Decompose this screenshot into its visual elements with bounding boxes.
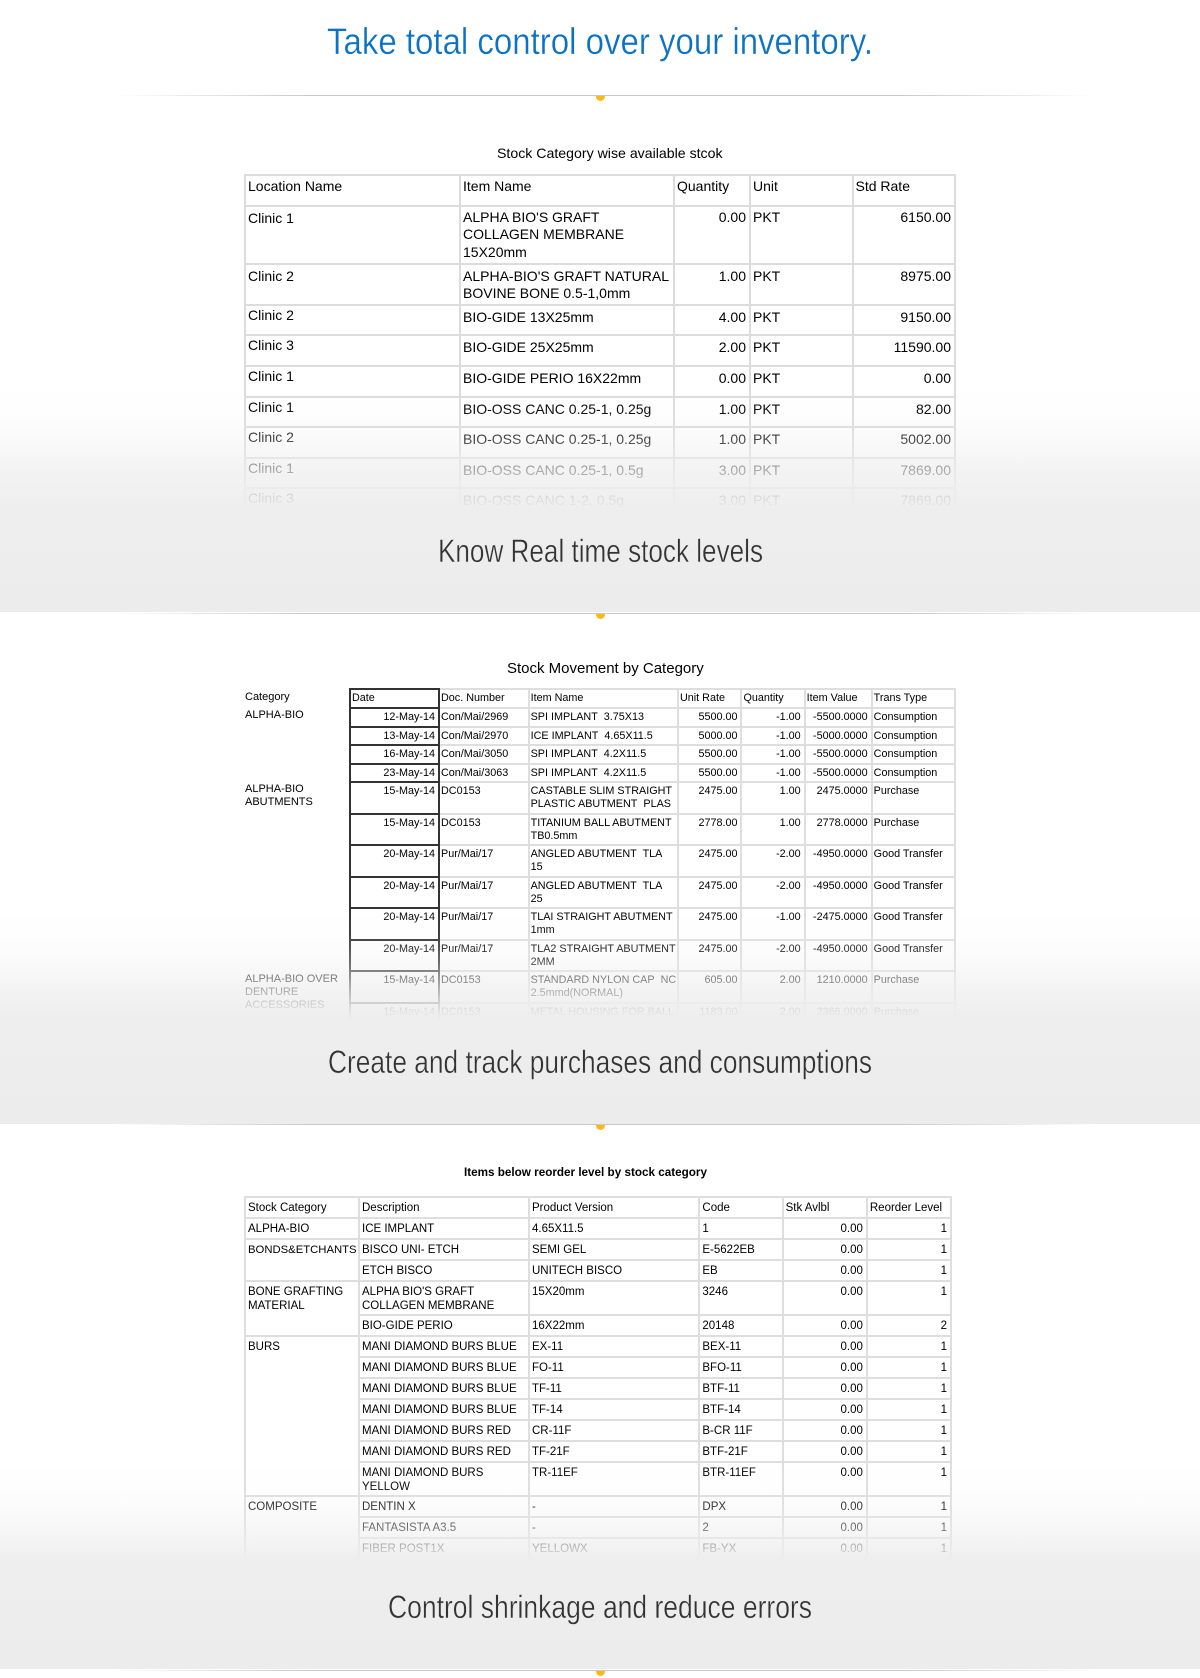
table: stock movement: -4950.0000 — [813, 848, 868, 860]
category labels: ALPHA-BIO OVER — [245, 973, 338, 985]
table: stock movement: -5500.0000 — [813, 766, 868, 778]
marker: section 3 dot — [596, 1671, 605, 1676]
table: stock movement: SPI IMPLANT 4.2X11.5 — [531, 766, 646, 778]
table: items below reorder level: 1 — [941, 1341, 947, 1353]
table: items below reorder level: 0.00 — [840, 1543, 863, 1555]
table: available stock: Quantity — [677, 178, 729, 194]
table: items below reorder level: ICE IMPLANT — [362, 1223, 434, 1235]
table: stock movement: 2475.0000 — [817, 785, 868, 797]
table: available stock: BIO-GIDE 13X25mm — [463, 309, 594, 325]
table: stock movement: -5500.0000 — [813, 748, 868, 760]
table: available stock — [244, 174, 956, 508]
table: items below reorder level: 2 — [941, 1320, 947, 1332]
table: items below reorder level: 0.00 — [840, 1223, 863, 1235]
table: available stock: 6150.00 — [900, 209, 951, 225]
table: items below reorder level: DPX — [702, 1501, 726, 1513]
table: available stock: Clinic 2 — [248, 268, 294, 284]
table: stock movement: Consumption — [874, 748, 937, 760]
table: available stock: Clinic 3 — [248, 337, 294, 353]
table: items below reorder level: MANI DIAMOND BURS BLUE — [362, 1362, 517, 1374]
table: stock movement: TLA2 STRAIGHT ABUTMENT — [531, 942, 676, 954]
table: stock movement: 15-May-14 — [383, 785, 435, 797]
table: stock movement: 1.00 — [780, 785, 801, 797]
table: available stock: BIO-OSS CANC 0.25-1, 0.25g — [463, 401, 651, 417]
table: stock movement: TITANIUM BALL ABUTMENT — [531, 816, 672, 828]
table: available stock: 9150.00 — [900, 309, 951, 325]
table: stock movement: ANGLED ABUTMENT TLA — [531, 848, 662, 860]
title: Take total control over your inventory. — [327, 21, 873, 62]
table: stock movement: 20-May-14 — [383, 848, 435, 860]
table: stock movement: Trans Type — [874, 692, 927, 704]
table: items below reorder level: TR-11EF — [532, 1467, 578, 1479]
table: items below reorder level: 1 — [941, 1244, 947, 1256]
table: items below reorder level: ALPHA BIO'S GRAFT — [362, 1286, 474, 1298]
table: items below reorder level: Product Version — [532, 1202, 613, 1214]
heading: real time stock levels: Know Real time stock levels — [438, 533, 763, 569]
table: items below reorder level: BURS — [248, 1341, 280, 1353]
table: items below reorder level: 0.00 — [840, 1425, 863, 1437]
table: stock movement: 605.00 — [704, 974, 737, 986]
table: available stock: BIO-GIDE 25X25mm — [463, 339, 594, 355]
table: items below reorder level: BTF-14 — [702, 1404, 741, 1416]
table title: stock category: Stock Category wise available stcok — [497, 145, 723, 161]
table: available stock: ALPHA BIO'S GRAFT COLLAGEN MEMBRANE 15X20mm — [463, 209, 624, 260]
category labels: Category — [245, 691, 290, 703]
table: stock movement: ANGLED ABUTMENT TLA — [531, 880, 662, 892]
table: stock movement: Con/Mai/2970 — [441, 730, 508, 742]
table: stock movement: Item Name — [531, 692, 583, 704]
table: available stock: PKT — [753, 209, 780, 225]
table: items below reorder level: 2 — [702, 1522, 709, 1534]
table: items below reorder level: BTF-21F — [702, 1446, 748, 1458]
table: stock movement: METAL HOUSING FOR BALL — [531, 1006, 674, 1018]
heading: shrinkage and errors: Control shrinkage and reduce errors — [388, 1589, 812, 1625]
table: available stock: 1.00 — [719, 268, 746, 284]
table: stock movement: -1.00 — [776, 730, 801, 742]
table: available stock: BIO-OSS CANC 1-2, 0.5g — [463, 492, 624, 508]
table: stock movement: 1.00 — [780, 816, 801, 828]
table: items below reorder level: 1 — [941, 1404, 947, 1416]
table: items below reorder level: 1 — [941, 1522, 947, 1534]
category labels: DENTURE — [245, 986, 298, 998]
table: stock movement: 2366.0000 — [817, 1006, 868, 1018]
table: items below reorder level: 0.00 — [840, 1522, 863, 1534]
table: items below reorder level: 0.00 — [840, 1362, 863, 1374]
table: items below reorder level: Stock Category — [248, 1202, 327, 1214]
table: stock movement: Pur/Mai/17 — [441, 848, 493, 860]
heading: purchases and consumptions: Create and track purchases and consumptions — [328, 1044, 872, 1080]
table: stock movement: PLASTIC ABUTMENT PLAS — [531, 798, 671, 810]
table: stock movement: 1210.0000 — [817, 974, 868, 986]
table: items below reorder level: 1 — [941, 1265, 947, 1277]
table: available stock: 3.00 — [719, 462, 746, 478]
table: stock movement: -5000.0000 — [813, 730, 868, 742]
table: items below reorder level: EX-11 — [532, 1341, 563, 1353]
table: items below reorder level: FIBER POST1X — [362, 1543, 444, 1555]
table: items below reorder level: Stk Avlbl — [786, 1202, 829, 1214]
table: available stock: 3.00 — [719, 492, 746, 508]
table: available stock: 1.00 — [719, 401, 746, 417]
table: stock movement: 1183.00 — [699, 1006, 737, 1018]
table: available stock: BIO-GIDE PERIO 16X22mm — [463, 370, 641, 386]
table: items below reorder level: 3246 — [702, 1286, 728, 1298]
table: items below reorder level: 1 — [941, 1286, 947, 1298]
table: items below reorder level: FANTASISTA A3.5 — [362, 1522, 456, 1534]
category labels: ACCESSORIES — [245, 999, 324, 1011]
category labels: ALPHA-BIO — [245, 709, 304, 721]
table: available stock: 2.00 — [719, 339, 746, 355]
table: available stock: PKT — [753, 268, 780, 284]
table title: reorder level: Items below reorder level by stock category — [464, 1166, 707, 1179]
table: stock movement: -4950.0000 — [813, 880, 868, 892]
table: stock movement: 20-May-14 — [383, 942, 435, 954]
table: stock movement: 2.00 — [780, 1006, 801, 1018]
table: items below reorder level: FO-11 — [532, 1362, 564, 1374]
table: items below reorder level: 0.00 — [840, 1501, 863, 1513]
table: stock movement: Con/Mai/3050 — [441, 748, 508, 760]
table: items below reorder level: - — [532, 1522, 536, 1534]
table: items below reorder level: 1 — [941, 1543, 947, 1555]
table: stock movement: Good Transfer — [874, 880, 943, 892]
table: items below reorder level: 1 — [941, 1425, 947, 1437]
table: stock movement: 5500.00 — [698, 748, 737, 760]
table: items below reorder level: 4.65X11.5 — [532, 1223, 584, 1235]
table: items below reorder level: EB — [702, 1265, 718, 1277]
table: items below reorder level: BIO-GIDE PERIO — [362, 1320, 453, 1332]
table: stock movement: -1.00 — [776, 766, 801, 778]
table: stock movement: Good Transfer — [874, 848, 943, 860]
table: stock movement: SPI IMPLANT 4.2X11.5 — [531, 748, 646, 760]
table: available stock: Clinic 1 — [248, 210, 294, 226]
table title: stock movement: Stock Movement by Category — [507, 660, 704, 677]
table: stock movement: Consumption — [874, 711, 937, 723]
table: items below reorder level: BONDS&ETCHANTS — [248, 1244, 357, 1256]
category labels — [245, 691, 338, 1011]
table: stock movement: -4950.0000 — [813, 942, 868, 954]
table: stock movement: 5500.00 — [698, 766, 737, 778]
table: stock movement: Good Transfer — [874, 911, 943, 923]
table: available stock: Item Name — [463, 178, 531, 194]
table: available stock: Unit — [753, 178, 778, 194]
table: stock movement: DC0153 — [441, 785, 481, 797]
table: available stock: ALPHA-BIO'S GRAFT NATURAL BOVINE BONE 0.5-1,0mm — [463, 268, 669, 301]
table: stock movement: Consumption — [874, 766, 937, 778]
table: available stock: 11590.00 — [894, 339, 951, 355]
table: items below reorder level: 0.00 — [840, 1404, 863, 1416]
table: items below reorder level: 15X20mm — [532, 1286, 584, 1298]
table: stock movement: 2.00 — [780, 974, 801, 986]
table: stock movement: Item Value — [807, 692, 857, 704]
table: available stock: Clinic 2 — [248, 429, 294, 445]
table: items below reorder level: Description — [362, 1202, 420, 1214]
table: items below reorder level: MANI DIAMOND BURS BLUE — [362, 1404, 517, 1416]
table: items below reorder level: - — [532, 1501, 536, 1513]
table: available stock: Clinic 2 — [248, 307, 294, 323]
table: available stock: Std Rate — [856, 178, 910, 194]
table: available stock: BIO-OSS CANC 0.25-1, 0.25g — [463, 431, 651, 447]
marker: top divider dot — [596, 96, 605, 101]
table: items below reorder level: BFO-11 — [702, 1362, 742, 1374]
table: items below reorder level — [244, 1196, 952, 1555]
table: items below reorder level: 1 — [941, 1467, 947, 1479]
table: available stock: Clinic 1 — [248, 399, 294, 415]
table: stock movement: 13-May-14 — [383, 730, 435, 742]
table: items below reorder level: TF-11 — [532, 1383, 562, 1395]
table: stock movement: Con/Mai/2969 — [441, 711, 508, 723]
table: items below reorder level: MANI DIAMOND BURS — [362, 1467, 483, 1479]
table: available stock: PKT — [753, 401, 780, 417]
table: items below reorder level: BEX-11 — [702, 1341, 741, 1353]
table: stock movement: -2.00 — [776, 848, 801, 860]
table: items below reorder level: FB-YX — [702, 1543, 736, 1555]
table: items below reorder level: 1 — [941, 1223, 947, 1235]
table: items below reorder level: 1 — [941, 1446, 947, 1458]
table: available stock: 7869.00 — [900, 462, 951, 478]
table: items below reorder level: 20148 — [702, 1320, 734, 1332]
table: items below reorder level: COLLAGEN MEMBRANE — [362, 1300, 494, 1312]
table: stock movement: -2.00 — [776, 880, 801, 892]
table: stock movement: -1.00 — [776, 711, 801, 723]
table: items below reorder level: 0.00 — [840, 1446, 863, 1458]
table: items below reorder level: DENTIN X — [362, 1501, 416, 1513]
table: stock movement: 2475.00 — [698, 880, 737, 892]
table: stock movement: DC0153 — [441, 1006, 481, 1018]
table: available stock: Clinic 1 — [248, 460, 294, 476]
table: items below reorder level: 1 — [941, 1501, 947, 1513]
table: stock movement: STANDARD NYLON CAP NC — [531, 974, 676, 986]
table: items below reorder level: YELLOW — [362, 1481, 410, 1493]
table: items below reorder level: BTR-11EF — [702, 1467, 756, 1479]
table: stock movement: -1.00 — [776, 748, 801, 760]
table: available stock: 0.00 — [719, 370, 746, 386]
table: stock movement: ICE IMPLANT 4.65X11.5 — [531, 730, 653, 742]
table: available stock: PKT — [753, 462, 780, 478]
table: stock movement: Purchase — [874, 816, 919, 828]
table: stock movement: -5500.0000 — [813, 711, 868, 723]
table: items below reorder level: MANI DIAMOND BURS BLUE — [362, 1341, 517, 1353]
table: stock movement: 20-May-14 — [383, 880, 435, 892]
table: stock movement: 2778.00 — [698, 816, 737, 828]
table: items below reorder level: TF-14 — [532, 1404, 563, 1416]
table: items below reorder level: 0.00 — [840, 1320, 863, 1332]
table: items below reorder level: 16X22mm — [532, 1320, 584, 1332]
table: stock movement: 23-May-14 — [383, 766, 435, 778]
table: available stock: PKT — [753, 370, 780, 386]
table: items below reorder level: 1 — [941, 1383, 947, 1395]
table: items below reorder level: COMPOSITE — [248, 1501, 317, 1513]
table: stock movement: 15-May-14 — [383, 1006, 435, 1018]
table: stock movement: DC0153 — [441, 816, 481, 828]
table: available stock: PKT — [753, 492, 780, 508]
table: items below reorder level: 1 — [702, 1223, 709, 1235]
table: items below reorder level: 0.00 — [840, 1286, 863, 1298]
table: stock movement: 2778.0000 — [817, 816, 868, 828]
table: stock movement: Pur/Mai/17 — [441, 911, 493, 923]
table: stock movement: 12-May-14 — [383, 711, 435, 723]
table: items below reorder level: 0.00 — [840, 1244, 863, 1256]
table: items below reorder level: YELLOWX — [532, 1543, 588, 1555]
table: available stock: 0.00 — [719, 209, 746, 225]
table: available stock: 4.00 — [719, 309, 746, 325]
table: items below reorder level: ETCH BISCO — [362, 1265, 432, 1277]
table: items below reorder level: 0.00 — [840, 1341, 863, 1353]
table: stock movement: 2MM — [531, 956, 555, 968]
table: items below reorder level: B-CR 11F — [702, 1425, 753, 1437]
table: items below reorder level: 1 — [941, 1362, 947, 1374]
table: stock movement: 5500.00 — [698, 711, 737, 723]
table: items below reorder level: TF-21F — [532, 1446, 570, 1458]
table: stock movement: 2475.00 — [698, 911, 737, 923]
table: stock movement: 15 — [531, 861, 543, 873]
table: stock movement: Date — [352, 692, 375, 704]
table: stock movement: CASTABLE SLIM STRAIGHT — [531, 785, 672, 797]
table: items below reorder level: E-5622EB — [702, 1244, 755, 1256]
table: available stock: 82.00 — [916, 401, 951, 417]
table: stock movement: SPI IMPLANT 3.75X13 — [531, 711, 644, 723]
table: items below reorder level: MATERIAL — [248, 1300, 305, 1312]
table: items below reorder level: BISCO UNI- ETCH — [362, 1244, 459, 1256]
table: stock movement: Unit Rate — [680, 692, 725, 704]
table: stock movement: 2.5mmd(NORMAL) — [531, 987, 623, 999]
table: stock movement: 20-May-14 — [383, 911, 435, 923]
table: items below reorder level: 0.00 — [840, 1383, 863, 1395]
table: stock movement: Con/Mai/3063 — [441, 766, 508, 778]
table: available stock: Clinic 3 — [248, 490, 294, 506]
table: items below reorder level: UNITECH BISCO — [532, 1265, 622, 1277]
table: items below reorder level: 0.00 — [840, 1467, 863, 1479]
table: stock movement: 2475.00 — [698, 785, 737, 797]
table: items below reorder level: BTF-11 — [702, 1383, 740, 1395]
table: items below reorder level: CR-11F — [532, 1425, 571, 1437]
table: stock movement: Quantity — [743, 692, 784, 704]
table: items below reorder level: MANI DIAMOND BURS BLUE — [362, 1383, 517, 1395]
table: items below reorder level: 0.00 — [840, 1265, 863, 1277]
table: stock movement: 5000.00 — [698, 730, 737, 742]
table: available stock: 5002.00 — [900, 431, 951, 447]
table: available stock: PKT — [753, 431, 780, 447]
table: available stock: Clinic 1 — [248, 368, 294, 384]
marker: section 2 dot — [596, 1125, 605, 1130]
table: available stock: BIO-OSS CANC 0.25-1, 0.5g — [463, 462, 644, 478]
table: stock movement: DC0153 — [441, 974, 481, 986]
table: stock movement: Purchase — [874, 785, 919, 797]
table: stock movement: Doc. Number — [441, 692, 505, 704]
table: stock movement: 15-May-14 — [383, 974, 435, 986]
table: available stock: PKT — [753, 309, 780, 325]
table: available stock: 8975.00 — [900, 268, 951, 284]
table: available stock: PKT — [753, 339, 780, 355]
table: available stock: 7869.00 — [900, 492, 951, 508]
table: stock movement: -2475.0000 — [813, 911, 868, 923]
table: items below reorder level: SEMI GEL — [532, 1244, 586, 1256]
table: stock movement: ATTACHMENT — [531, 1018, 603, 1030]
table: stock movement: -1.00 — [776, 911, 801, 923]
category labels: ALPHA-BIO — [245, 783, 304, 795]
table: stock movement — [349, 688, 956, 1030]
table: stock movement: 2475.00 — [698, 848, 737, 860]
table: stock movement: 16-May-14 — [383, 748, 435, 760]
table: available stock: 1.00 — [719, 431, 746, 447]
table: stock movement: TB0.5mm — [531, 830, 577, 842]
table: stock movement: Pur/Mai/17 — [441, 880, 493, 892]
table: items below reorder level: Reorder Level — [870, 1202, 942, 1214]
table: stock movement: 15-May-14 — [383, 816, 435, 828]
table: items below reorder level: MANI DIAMOND BURS RED — [362, 1425, 511, 1437]
marker: section 1 dot — [596, 614, 605, 619]
table: stock movement: Purchase — [874, 974, 919, 986]
category labels: ABUTMENTS — [245, 796, 313, 808]
table: available stock: Location Name — [248, 178, 342, 194]
table: stock movement: 1mm — [531, 924, 555, 936]
table: stock movement: Consumption — [874, 730, 937, 742]
table: stock movement: Purchase — [874, 1006, 919, 1018]
table: items below reorder level: MANI DIAMOND BURS RED — [362, 1446, 511, 1458]
table: stock movement: 2475.00 — [698, 942, 737, 954]
table: items below reorder level: Code — [702, 1202, 730, 1214]
table: available stock: 0.00 — [924, 370, 951, 386]
table: stock movement: -2.00 — [776, 942, 801, 954]
table: stock movement: Pur/Mai/17 — [441, 942, 493, 954]
table: stock movement: TLAI STRAIGHT ABUTMENT — [531, 911, 673, 923]
table: items below reorder level: ALPHA-BIO — [248, 1223, 309, 1235]
table: stock movement: Good Transfer — [874, 942, 943, 954]
table: items below reorder level: BONE GRAFTING — [248, 1286, 343, 1298]
table: stock movement: 25 — [531, 892, 543, 904]
